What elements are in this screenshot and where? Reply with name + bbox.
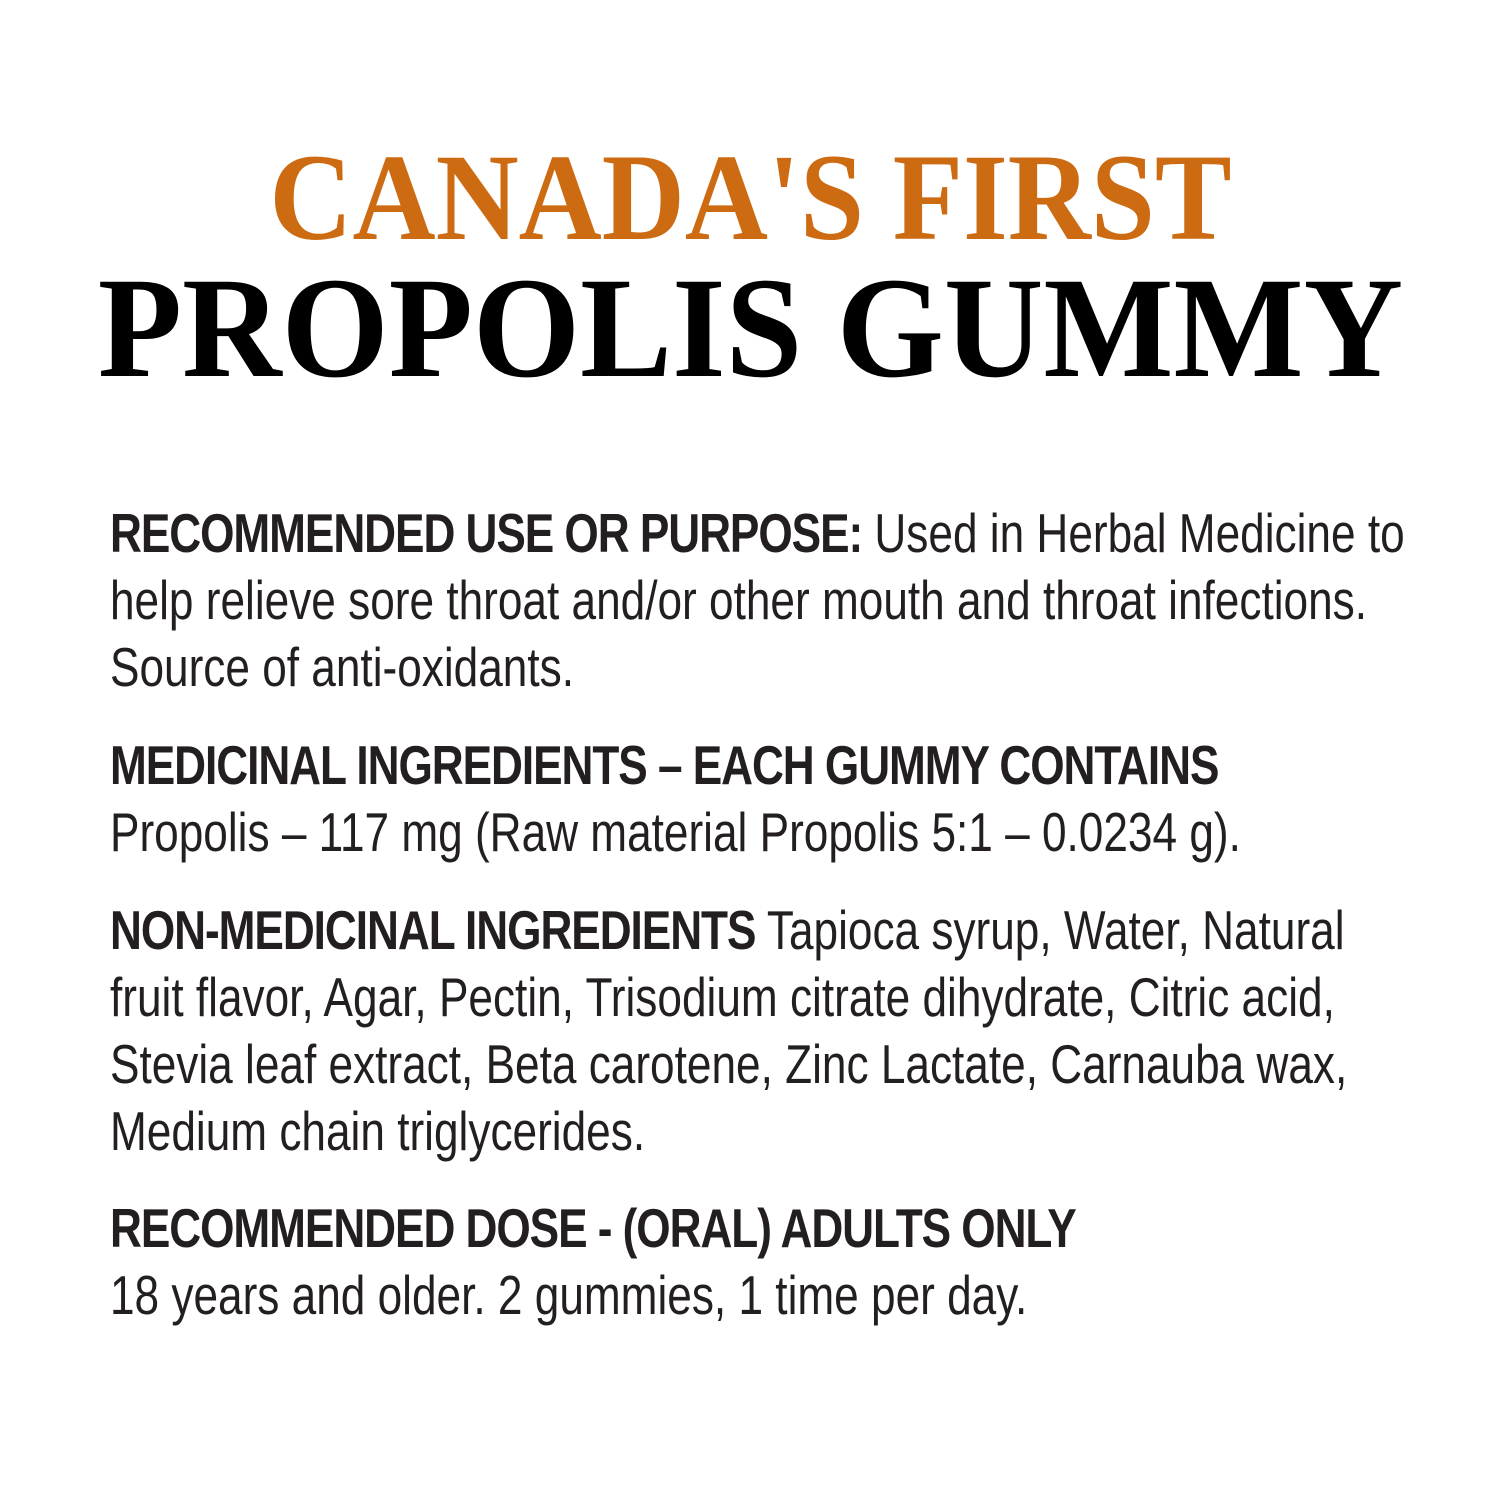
section: medicinal ingredients — [110, 734, 1241, 863]
section: recommended use: RECOMMENDED USE OR PURPOSE: Used in Herbal Medicine to — [110, 502, 1405, 564]
section: non-medicinal ingredients: fruit flavor, Agar, Pectin, Trisodium citrate dihydrate, Citric acid, — [110, 966, 1335, 1028]
section: recommended use: help relieve sore throat and/or other mouth and throat infections. — [110, 569, 1367, 631]
section: non-medicinal ingredients: Stevia leaf extract, Beta carotene, Zinc Lactate, Carnauba wax, — [110, 1033, 1347, 1095]
title: canada's first: CANADA'S FIRST — [269, 129, 1232, 266]
section: medicinal ingredients: MEDICINAL INGREDIENTS – EACH GUMMY CONTAINS — [110, 734, 1218, 796]
section: medicinal ingredients: Propolis – 117 mg (Raw material Propolis 5:1 – 0.0234 g). — [110, 801, 1241, 863]
section: recommended use: Source of anti-oxidants. — [110, 636, 574, 698]
section: non-medicinal ingredients: Medium chain triglycerides. — [110, 1100, 645, 1162]
section: non-medicinal ingredients — [110, 899, 1347, 1162]
section: recommended use — [110, 502, 1405, 698]
section: recommended dose: 18 years and older. 2 gummies, 1 time per day. — [110, 1264, 1027, 1326]
section: non-medicinal ingredients: NON-MEDICINAL INGREDIENTS Tapioca syrup, Water, Natural — [110, 899, 1345, 961]
title: propolis gummy: PROPOLIS GUMMY — [98, 249, 1403, 408]
section: recommended dose — [110, 1197, 1076, 1326]
section: recommended dose: RECOMMENDED DOSE - (ORAL) ADULTS ONLY — [110, 1197, 1076, 1259]
